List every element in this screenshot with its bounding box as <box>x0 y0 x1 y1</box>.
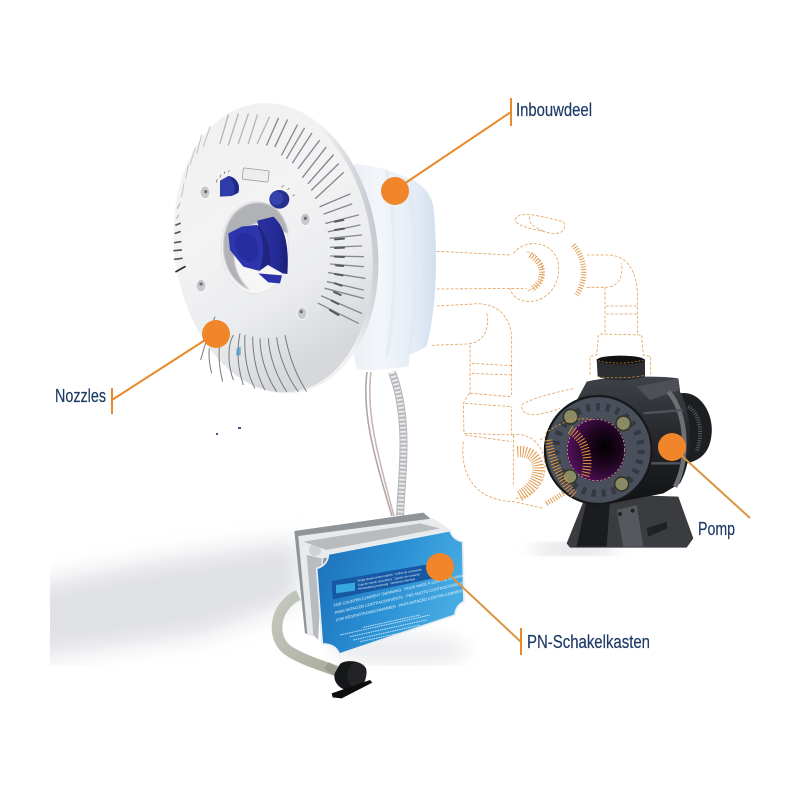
pump bore <box>567 419 625 481</box>
box title band: PN-Schaltung einphasig · Drehstrom Wechsel <box>358 577 416 591</box>
box rear housing <box>294 513 450 635</box>
lower valve handle <box>522 388 575 414</box>
centre opening <box>221 202 289 294</box>
black connector <box>327 661 372 698</box>
callout: Inbouwdeel: Inbouwdeel <box>516 100 592 120</box>
background: floor shadow <box>30 540 620 666</box>
thin wires <box>366 372 392 516</box>
box blue face <box>317 531 464 654</box>
infographic: product diagram <box>50 98 751 698</box>
pump <box>545 356 712 548</box>
blue left knob <box>220 176 239 197</box>
box text lines <box>333 573 468 622</box>
callout: PN-Schakelkasten: PN-Schakelkasten <box>527 632 650 652</box>
callout: PN-Schakelkasten <box>426 553 650 655</box>
callout: Nozzles <box>55 320 230 414</box>
callout: Pomp <box>658 433 750 539</box>
box white frame <box>298 518 450 637</box>
lower vent slots <box>201 317 307 392</box>
box text lines: ZUM GEGENSTROMSCHWIMMEN · PARA NATAÇÃO CONTRA-CORRENTE <box>335 587 467 622</box>
disc face <box>156 91 391 405</box>
pump motor end <box>680 393 712 463</box>
left vent slots <box>174 127 210 272</box>
grey hose <box>277 595 338 672</box>
box text lines: FOR COUNTER CURRENT SWIMMING · POUR NAGE À CONTRE COURANT <box>333 573 468 608</box>
callout: Pomp: Pomp <box>698 519 735 539</box>
tiny dial marks <box>216 170 295 196</box>
box title band: Single phase control cabinet · Coffret de commande <box>357 567 422 583</box>
cables <box>366 372 404 516</box>
label plate <box>242 168 269 182</box>
pump base <box>567 493 693 548</box>
blue fitting <box>228 217 288 283</box>
control box <box>277 513 468 698</box>
screw holes <box>196 186 310 320</box>
callout: Inbouwdeel <box>381 98 592 205</box>
inbouwdeel back housing <box>337 163 436 370</box>
lower left pipe <box>432 304 512 397</box>
box title band <box>332 563 433 599</box>
lower couplings <box>512 427 563 498</box>
top valve handle <box>515 215 565 234</box>
callout: Nozzles: Nozzles <box>55 386 106 406</box>
box title band: Caja de mando monofásica · Quadro de comando <box>358 572 421 587</box>
pump top port <box>597 356 645 380</box>
blue mark <box>236 347 241 355</box>
right elbow <box>587 255 637 333</box>
disc flange <box>155 90 397 407</box>
pump body <box>573 377 690 505</box>
wall disc <box>155 90 397 407</box>
blue right knob <box>269 190 289 209</box>
braided hose <box>392 372 404 516</box>
upper coupling <box>510 244 559 301</box>
small marks <box>216 428 241 434</box>
pump flange <box>545 396 652 504</box>
box fine print <box>340 615 430 642</box>
thread overlay <box>545 419 593 495</box>
flange bolts <box>563 409 631 491</box>
dashed pipework drawing <box>432 215 651 508</box>
threaded ribs <box>517 245 584 504</box>
upper pipe <box>437 251 527 289</box>
box text lines: PARA NATACIÓN CONTRACORRIENTE · PER NUOTO CONTROCORRENTE <box>334 580 467 615</box>
upper and right vent slots <box>220 114 365 323</box>
